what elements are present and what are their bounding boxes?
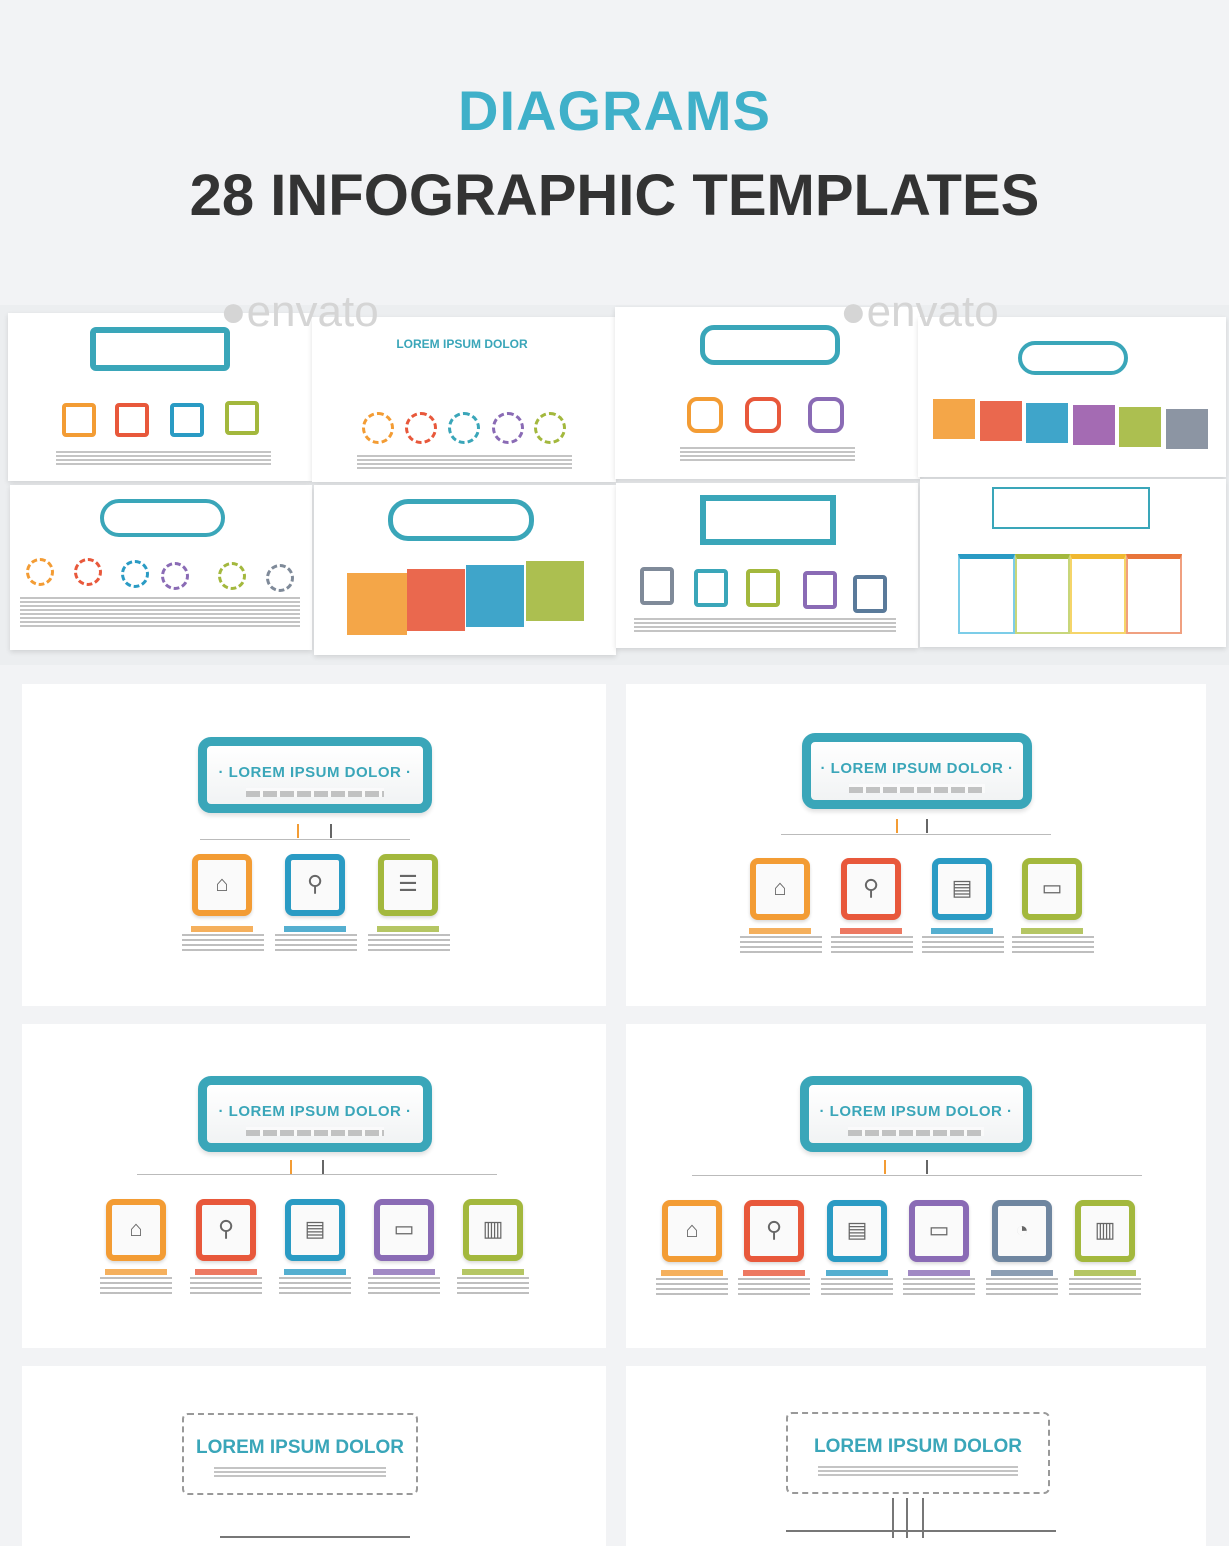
panel: 3-item diagram: ☰ <box>398 871 418 896</box>
panel: 4-item diagram: ⚲ <box>863 875 879 900</box>
panel: 5-item diagram: ▭ <box>394 1216 414 1241</box>
child boxes: ⌂ <box>215 871 229 896</box>
panel: 6-item diagram: ▭ <box>929 1217 949 1242</box>
panel: 3-item diagram: ⚲ <box>307 871 323 896</box>
panel: 4-item diagram: ⌂ <box>773 875 787 900</box>
panel: dashed diagram left: LOREM IPSUM DOLOR <box>196 1437 404 1458</box>
panel: 6-item diagram: ▥ <box>1095 1217 1115 1242</box>
panel: 5-item diagram: ⚲ <box>218 1216 234 1241</box>
watermark: envato: ●envato <box>840 287 999 336</box>
panel: 5-item diagram: ▤ <box>305 1216 325 1241</box>
card: circles <box>312 317 616 482</box>
panel: dashed diagram right <box>626 1366 1206 1546</box>
main box: · LOREM IPSUM DOLOR · <box>218 764 412 781</box>
panel: 5-item diagram <box>22 1024 606 1348</box>
panel: 6-item diagram: ◔ <box>1015 1217 1029 1242</box>
panel: 4-item diagram <box>626 684 1206 1006</box>
card: coloured columns <box>314 485 616 655</box>
panel: dashed diagram right: LOREM IPSUM DOLOR <box>814 1436 1022 1457</box>
panel: 6-item diagram: ▤ <box>847 1217 867 1242</box>
panel: 4-item diagram: ▤ <box>952 875 972 900</box>
card: coloured blocks <box>918 317 1226 477</box>
panel: 6-item diagram: · LOREM IPSUM DOLOR · <box>820 1103 1012 1120</box>
card: hexagons <box>615 307 920 479</box>
panel: 5-item diagram: ▥ <box>483 1216 503 1241</box>
card: circles: LOREM IPSUM DOLOR <box>396 337 528 351</box>
panel: 4-item diagram: ▭ <box>1042 875 1062 900</box>
panel: 4-item diagram: · LOREM IPSUM DOLOR · <box>820 760 1014 777</box>
child boxes <box>192 854 252 916</box>
panel: 3-item diagram <box>22 684 606 1006</box>
panel: 6-item diagram: ⚲ <box>766 1217 782 1242</box>
watermark: envato: ●envato <box>220 287 379 336</box>
panel: 6-item diagram <box>626 1024 1206 1348</box>
card: square boxes <box>8 313 312 481</box>
panel: 5-item diagram: ⌂ <box>129 1216 143 1241</box>
title: DIAGRAMS: DIAGRAMS <box>458 79 771 142</box>
card: four columns <box>920 479 1226 647</box>
panel: dashed diagram left <box>22 1366 606 1546</box>
card: tab boxes <box>616 483 918 648</box>
main box <box>198 737 432 813</box>
panel: 6-item diagram: ⌂ <box>685 1217 699 1242</box>
collage of template previews <box>4 287 1229 660</box>
subtitle: 28 infographic templates: 28 INFOGRAPHIC TEMPLATES <box>190 163 1039 228</box>
panel: 5-item diagram: · LOREM IPSUM DOLOR · <box>218 1103 412 1120</box>
card: gears <box>10 485 312 650</box>
